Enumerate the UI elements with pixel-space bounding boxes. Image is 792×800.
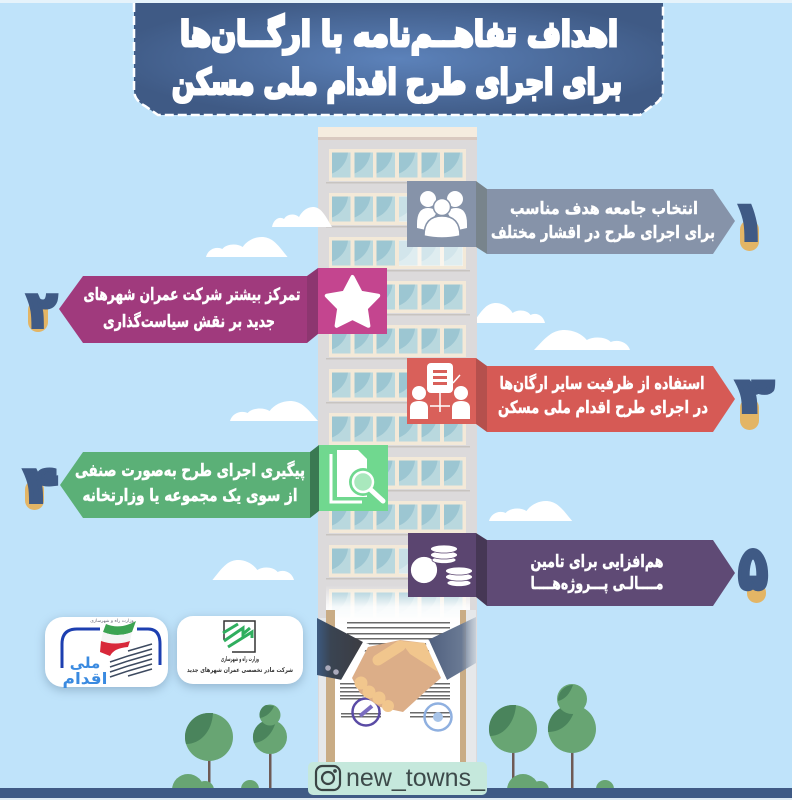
trees	[172, 684, 614, 800]
company name: وزارت راه و شهرسازی	[221, 655, 259, 663]
number 5: ۵	[738, 534, 768, 604]
instagram handle tag	[308, 762, 487, 795]
text	[530, 552, 664, 594]
panel: goal 5	[408, 533, 768, 606]
text	[491, 199, 715, 243]
clouds	[206, 237, 630, 580]
icon: star	[327, 277, 378, 326]
logo card: Eghdam Melli: وزارت راه و شهرسازی	[90, 619, 134, 624]
panel: goal 2	[27, 268, 387, 343]
building graphic	[110, 644, 152, 677]
number 2: ۲	[27, 281, 57, 339]
title line 1: اهداف تفاهــم‌نامه با ارگــان‌ها	[180, 14, 618, 55]
text: برای اجرای طرح در اقشار مختلف	[491, 223, 715, 243]
ground	[0, 788, 792, 798]
text: جدید بر نقش سیاست‌گذاری	[103, 311, 275, 332]
cloud in front of building	[272, 207, 332, 227]
contract with signature seals	[340, 622, 452, 730]
logo card: Eghdam Melli	[45, 617, 168, 688]
company name: شرکت مادر تخصصی عمران شهرهای جدید	[187, 666, 293, 674]
logo wordmark: ملی	[70, 654, 100, 672]
text	[84, 285, 300, 332]
text: تمرکز بیشتر شرکت عمران شهرهای	[84, 285, 300, 305]
text	[75, 460, 305, 506]
icon: instagram	[316, 766, 340, 790]
text: در اجرای طرح اقدام ملی مسکن	[498, 398, 708, 418]
logo wordmark	[62, 654, 108, 688]
icon: network	[410, 363, 470, 419]
text: هم‌افزایی برای تامین	[530, 552, 664, 572]
icon: document search	[331, 450, 383, 502]
text: استفاده از ظرفیت سایر ارگان‌ها	[500, 373, 704, 394]
flag	[100, 621, 136, 656]
company name	[187, 655, 293, 674]
panel: goal 1	[407, 181, 765, 254]
panel: goal 4	[24, 445, 388, 518]
handle text: new_towns_	[346, 764, 486, 792]
handshake	[317, 617, 476, 712]
building	[318, 127, 477, 790]
icon: coins	[410, 545, 472, 586]
logo wordmark: اقدام	[62, 669, 108, 688]
company emblem	[223, 621, 255, 652]
text: پیگیری اجرای طرح به‌صورت صنفی	[75, 460, 305, 481]
panel: goal 3	[407, 358, 774, 432]
logo card: New Towns company	[177, 616, 303, 684]
title banner	[134, 3, 663, 115]
title line 2: برای اجرای طرح اقدام ملی مسکن	[172, 63, 622, 103]
text: مــــالـی پـــروژه‌هــــا	[530, 574, 664, 594]
text	[498, 373, 708, 418]
number 4: ۴	[24, 456, 58, 514]
number 3: ۳	[736, 368, 774, 424]
text: انتخاب جامعه هدف مناسب	[510, 199, 698, 219]
number 1: ۱	[733, 190, 765, 253]
icon: people group	[417, 191, 467, 238]
logo frame arc	[62, 629, 160, 668]
text: از سوی یک مجموعه یا وزارتخانه	[82, 486, 298, 506]
